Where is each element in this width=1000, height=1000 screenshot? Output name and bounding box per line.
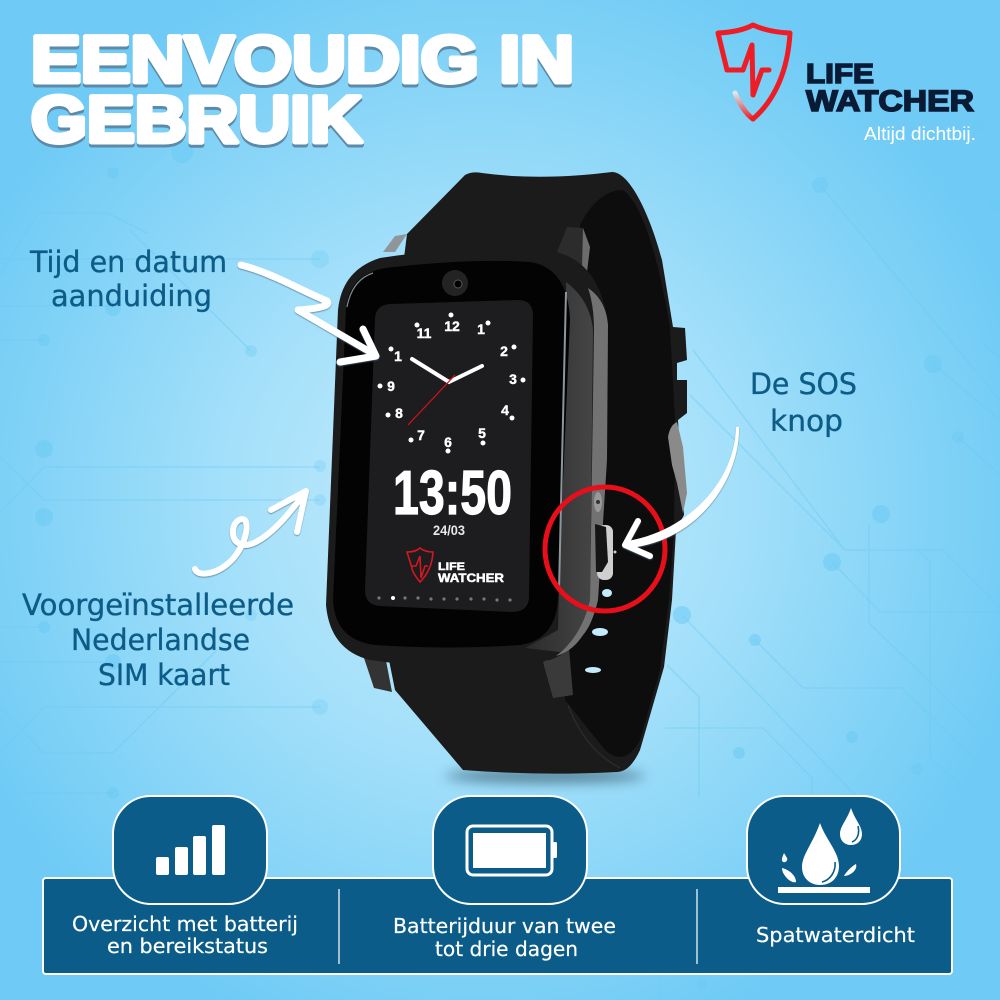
watch product illustration	[326, 172, 687, 774]
logo wordmark: LIFE	[806, 58, 874, 89]
logo: Life Watcher	[718, 25, 976, 144]
title: GEBRUIK	[31, 85, 362, 159]
feature text: battery life: Batterijduur van twee	[393, 914, 616, 938]
feature text: overview: Overzicht met batterij	[72, 912, 298, 936]
watch shadow	[445, 769, 645, 783]
watch strap	[385, 172, 687, 774]
side band dark	[525, 282, 593, 652]
mini logo	[407, 548, 504, 585]
title: EENVOUDIG IN	[31, 22, 574, 96]
SOS button	[595, 524, 616, 580]
strap holes	[585, 589, 612, 673]
clock face: 12	[444, 318, 460, 334]
mini logo: LIFE	[438, 561, 465, 573]
side band metal	[556, 288, 608, 656]
label: time and date	[29, 245, 227, 313]
arrow: to SOS button	[625, 427, 739, 556]
logo wordmark: WATCHER	[806, 85, 974, 118]
clock face: 4	[501, 402, 509, 418]
arrow: to SIM card	[195, 491, 306, 574]
label: time and date: Tijd en datum	[29, 245, 227, 279]
label: SIM card: SIM kaart	[98, 658, 230, 692]
label: time and date: aanduiding	[51, 279, 212, 313]
label: SOS button: De SOS	[750, 367, 857, 401]
page indicator dots	[377, 596, 512, 602]
logo tagline: Altijd dichtbij.	[864, 124, 976, 144]
clock face: 9	[387, 378, 395, 394]
clock face: 2	[500, 343, 508, 359]
icon: signal bars	[113, 796, 267, 904]
label: SIM card: Voorgeïnstalleerde	[22, 588, 294, 622]
logo wordmark	[806, 58, 974, 118]
title: EENVOUDIG IN	[31, 25, 574, 99]
icon: battery	[433, 796, 587, 904]
digital time: 13:50	[393, 459, 512, 528]
lugs	[362, 227, 590, 698]
clock face: 7	[417, 427, 425, 443]
small side button	[594, 492, 602, 512]
feature text: overview: en bereikstatus	[107, 934, 268, 958]
clock face	[378, 312, 526, 454]
clock face: 1	[477, 321, 485, 337]
clock face: 3	[509, 371, 517, 387]
red highlight circle	[545, 487, 665, 611]
arrow: to time and date	[241, 265, 376, 362]
label: SOS button	[750, 367, 857, 438]
label: SIM card: Nederlandse	[71, 623, 250, 657]
clock face: 6	[444, 434, 452, 450]
clock face: 11	[417, 325, 432, 341]
watch body	[326, 248, 608, 666]
title	[31, 22, 574, 159]
label: SIM card	[22, 588, 294, 692]
mini logo: WATCHER	[438, 571, 504, 585]
screen	[365, 300, 533, 612]
icon: shield with heartbeat	[718, 25, 790, 119]
icon: water drops	[747, 796, 900, 904]
feature text: splash proof: Spatwaterdicht	[756, 923, 915, 947]
feature text: overview	[72, 912, 298, 958]
clock face: 1	[394, 348, 402, 364]
glass bezel	[333, 261, 570, 648]
date: 24/03	[433, 522, 465, 538]
panel: features bar	[43, 796, 952, 974]
camera	[442, 270, 468, 296]
feature text: battery life: tot drie dagen	[435, 937, 578, 961]
feature text: battery life	[393, 914, 616, 961]
title: GEBRUIK	[31, 82, 362, 156]
clock face: 5	[478, 425, 486, 441]
metal buckle	[668, 422, 687, 513]
clock face: 8	[395, 405, 403, 421]
label: SOS button: knop	[770, 404, 843, 438]
